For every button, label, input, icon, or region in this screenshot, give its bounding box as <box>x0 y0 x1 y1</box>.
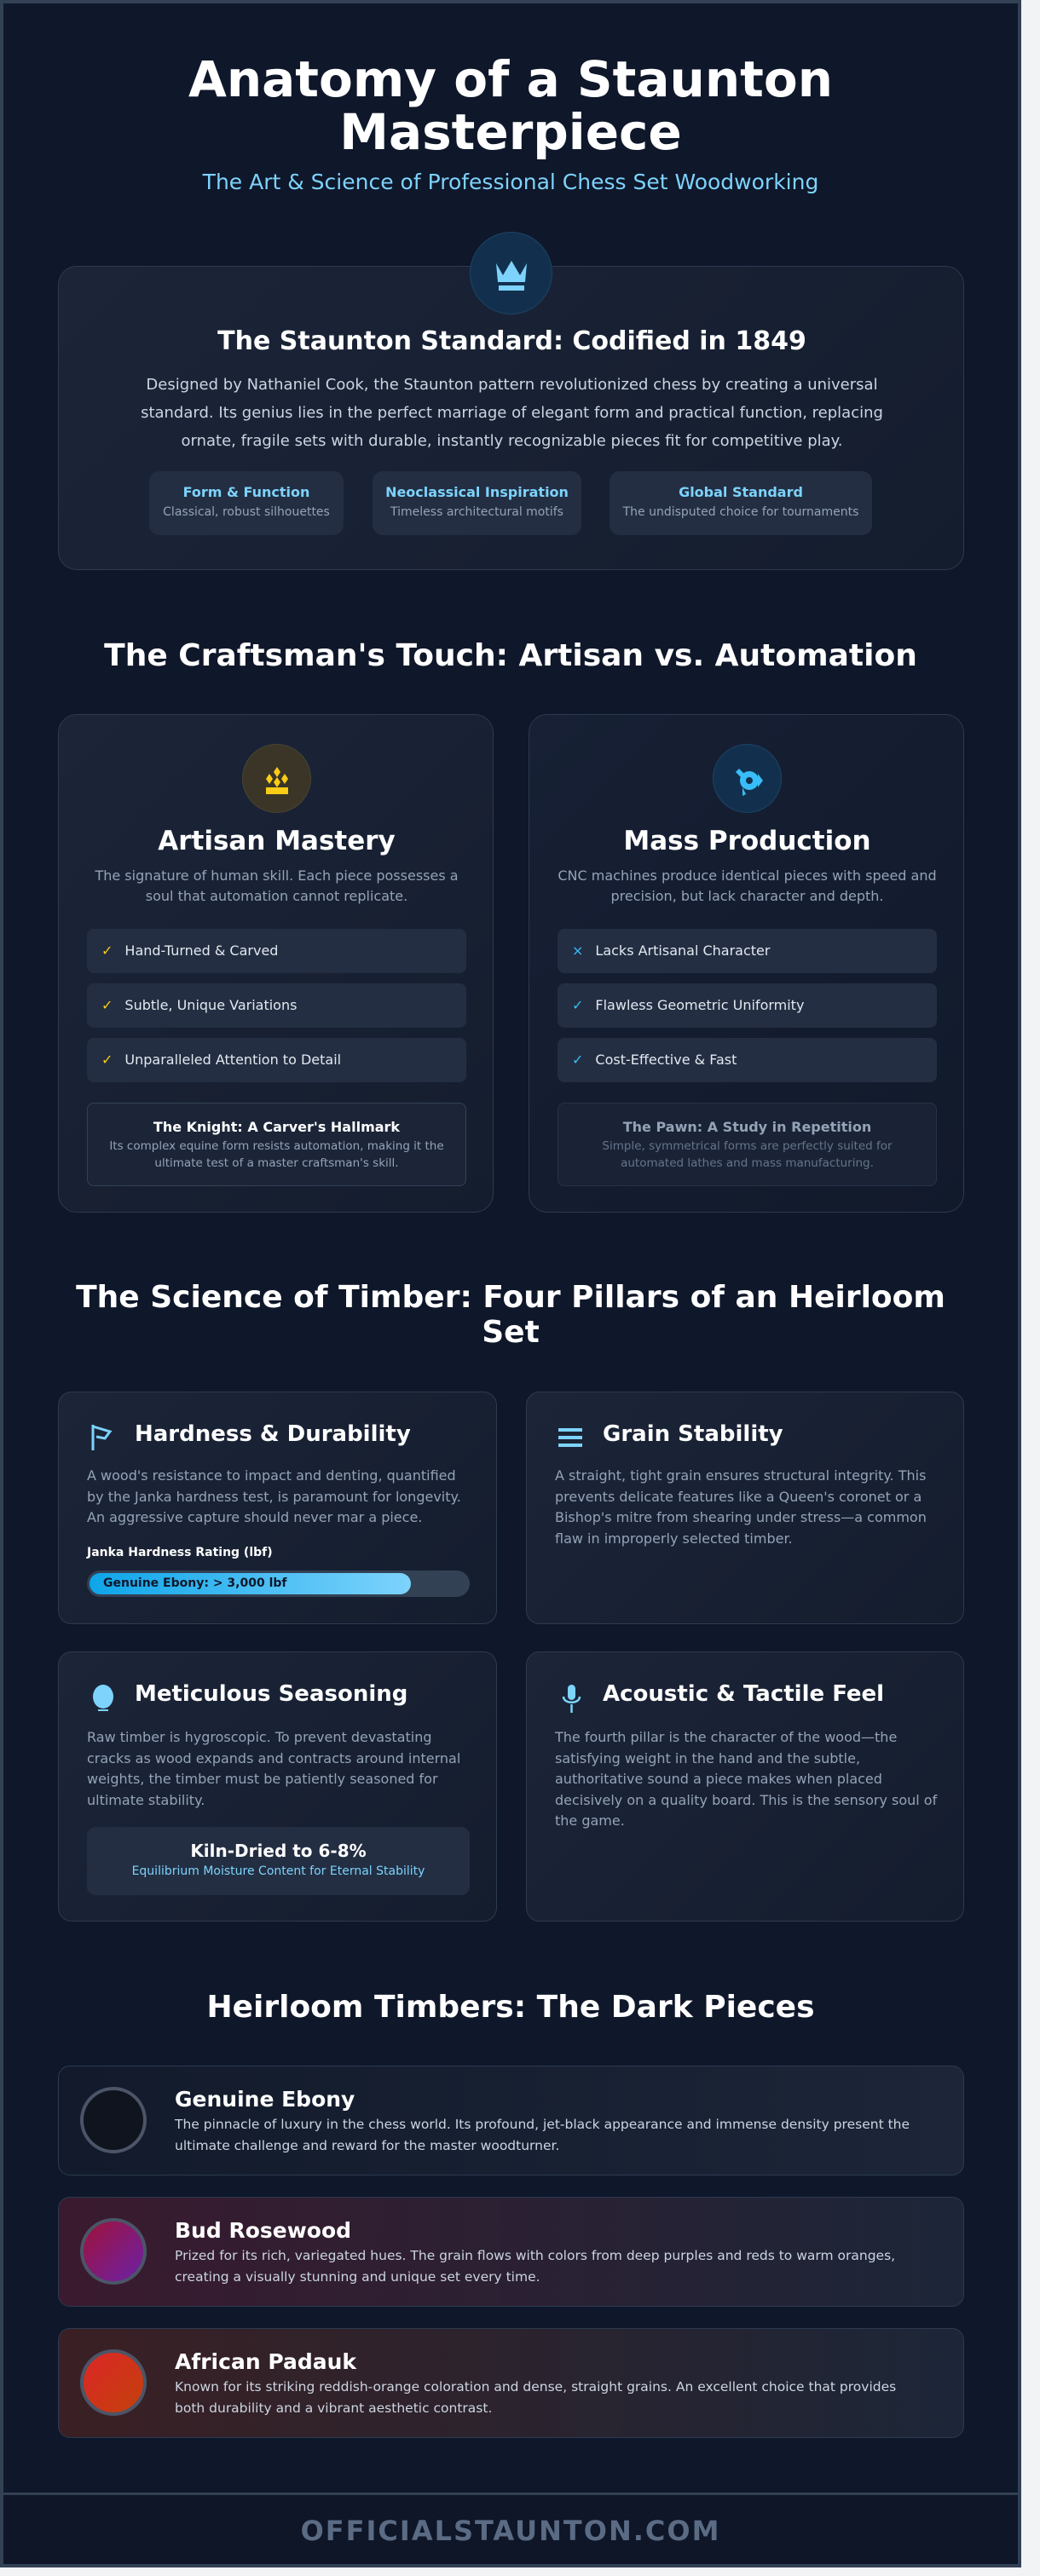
panel: rosewood: Bud Rosewood <box>175 2218 351 2243</box>
icon: artisan <box>242 744 311 813</box>
callout: pawn: The Pawn: A Study in Repetition <box>623 1119 871 1135</box>
icon: hardness <box>92 1425 113 1450</box>
panel: padauk: African Padauk <box>175 2349 356 2374</box>
panel: hardness: A wood's resistance to impact and denting, quantified by the Janka hardness test, is paramount for longevity. An aggressive capture should never mar a piece. <box>87 1467 461 1525</box>
panel: padauk: Known for its striking reddish-orange coloration and dense, straight grains. An excellent choice that provides both durability and a vibrant aesthetic contrast. <box>175 2379 896 2416</box>
label: janka: Janka Hardness Rating (lbf) <box>87 1546 273 1559</box>
panel: ebony <box>58 2066 964 2175</box>
list item: ✓ Unparalleled Attention to Detail <box>101 1052 341 1068</box>
callout: kiln dried: Equilibrium Moisture Content for Eternal Stability <box>132 1864 425 1878</box>
callout: kiln dried: Kiln-Dried to 6-8% <box>190 1841 367 1861</box>
list item <box>558 929 937 973</box>
panel: seasoning: Meticulous Seasoning <box>135 1681 407 1707</box>
callout: form & function: Classical, robust silhouettes <box>163 505 330 519</box>
list item: ✓ Hand-Turned & Carved <box>101 942 278 959</box>
icon: grain <box>558 1428 582 1447</box>
list item: × Lacks Artisanal Character <box>572 942 770 959</box>
panel: grain: Grain Stability <box>603 1421 783 1447</box>
panel: hardness: Hardness & Durability <box>135 1421 411 1447</box>
icon: rosewood swatch <box>80 2218 147 2285</box>
panel: mass production <box>529 714 964 1213</box>
panel: artisan <box>58 714 494 1213</box>
panel: padauk <box>58 2328 964 2438</box>
footer: OFFICIALSTAUNTON.COM <box>301 2515 720 2547</box>
callout: form & function: Form & Function <box>183 484 309 500</box>
callout: pawn <box>558 1103 937 1186</box>
callout: global standard <box>610 471 872 535</box>
list item <box>558 1038 937 1082</box>
list item <box>558 983 937 1028</box>
icon: drop <box>93 1685 113 1711</box>
bar chart: janka <box>87 1570 470 1597</box>
callout: pawn: Simple, symmetrical forms are perfectly suited for automated lathes and mass manufacturing. <box>602 1139 893 1170</box>
text: The signature of human skill. Each piece possesses a soul that automation cannot replicate. <box>95 867 459 904</box>
callout: knight: The Knight: A Carver's Hallmark <box>153 1119 400 1135</box>
list item <box>87 1038 466 1082</box>
panel: grain <box>526 1392 964 1624</box>
callout: neoclassical <box>373 471 581 535</box>
heading: staunton standard: The Staunton Standard: Codified in 1849 <box>217 326 806 356</box>
icon: padauk swatch <box>80 2349 147 2416</box>
callout: global standard: The undisputed choice for tournaments <box>623 505 858 519</box>
callout: global standard: Global Standard <box>679 484 803 500</box>
heading: science of timber: The Science of Timber: Four Pillars of an Heirloom Set <box>76 1280 945 1350</box>
heading: heirloom timbers: Heirloom Timbers: The Dark Pieces <box>206 1990 815 2025</box>
title <box>188 50 833 161</box>
panel: staunton standard <box>58 266 964 570</box>
icon: ebony swatch <box>80 2087 147 2153</box>
text: staunton description: Designed by Nathaniel Cook, the Staunton pattern revolutionized chess by creating a universal standard. Its genius lies in the perfect marriage of elegant form and practical function, replacing ornate, fragile sets with durable, instantly recognizable pieces fit for competitive play. <box>141 376 883 450</box>
icon: microphone <box>563 1685 581 1713</box>
panel: acoustic: The fourth pillar is the character of the wood—the satisfying weight in the hand and the subtle, authoritative sound a piece makes when placed decisively on a quality board. This is the sensory soul of the game. <box>555 1729 937 1829</box>
icon: crown <box>470 232 552 314</box>
panel: seasoning: Raw timber is hygroscopic. To prevent devastating cracks as wood expands and contracts around internal weights, the timber must be patiently seasoned for ultimate stability. <box>87 1729 460 1808</box>
panel: rosewood <box>58 2197 964 2307</box>
panel: hardness <box>58 1392 497 1624</box>
panel: acoustic <box>526 1651 964 1922</box>
callout: form & function <box>149 471 344 535</box>
panel: acoustic: Acoustic & Tactile Feel <box>603 1681 884 1707</box>
icon: machine <box>713 744 782 813</box>
list item: ✓ Flawless Geometric Uniformity <box>572 997 804 1013</box>
bar chart: janka: Genuine Ebony: > 3,000 lbf <box>103 1576 286 1590</box>
callout: knight: Its complex equine form resists automation, making it the ultimate test of a master craftsman's skill. <box>109 1139 444 1170</box>
heading: mass production: Mass Production <box>623 826 871 856</box>
panel: rosewood: Prized for its rich, variegated hues. The grain flows with colors from deep purples and reds to warm oranges, creating a visually stunning and unique set every time. <box>175 2248 895 2285</box>
panel: ebony: The pinnacle of luxury in the chess world. Its profound, jet-black appearance and immense density present the ultimate challenge and reward for the master woodturner. <box>175 2117 910 2153</box>
callout: neoclassical: Timeless architectural motifs <box>390 505 563 519</box>
heading: craftsman: The Craftsman's Touch: Artisan vs. Automation <box>104 638 917 673</box>
list item: ✓ Cost-Effective & Fast <box>572 1052 737 1068</box>
text: CNC machines produce identical pieces with speed and precision, but lack character and depth. <box>558 867 937 904</box>
panel: seasoning <box>58 1651 497 1922</box>
callout: kiln dried <box>87 1827 470 1895</box>
list item <box>87 929 466 973</box>
list item: ✓ Subtle, Unique Variations <box>101 997 297 1013</box>
footer <box>3 2492 1018 2564</box>
title: Anatomy of a Staunton <box>188 50 833 108</box>
heading: artisan mastery: Artisan Mastery <box>158 826 396 856</box>
callout: knight <box>87 1103 466 1186</box>
subtitle: The Art & Science of Professional Chess Set Woodworking <box>203 170 818 194</box>
title: Masterpiece <box>339 103 682 161</box>
callout: neoclassical: Neoclassical Inspiration <box>385 484 569 500</box>
panel: ebony: Genuine Ebony <box>175 2087 355 2112</box>
panel: grain: A straight, tight grain ensures structural integrity. This prevents delicate features like a Queen's coronet or a Bishop's mitre from shearing under stress—a common flaw in improperly selected timber. <box>555 1467 927 1546</box>
list item <box>87 983 466 1028</box>
